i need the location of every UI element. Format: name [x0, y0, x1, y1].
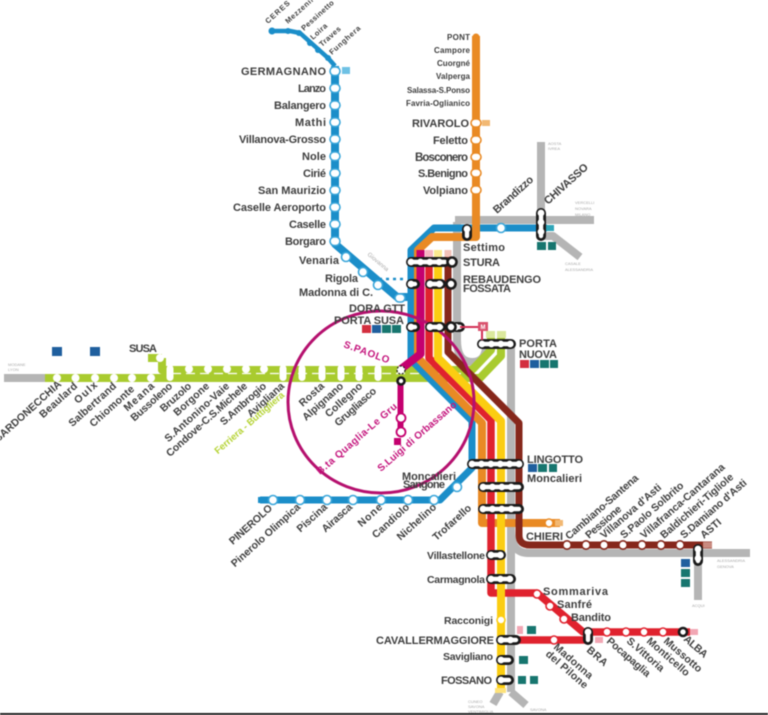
- labels: north blue line: Lanzo: [298, 83, 326, 95]
- labels: city stations: REBAUDENGO: [463, 274, 541, 286]
- destination notes: CUNEO: [468, 699, 482, 704]
- labels: north blue line: Giovanna: [366, 252, 390, 273]
- labels: Asti line: S.Paolo Solbrito: [618, 480, 686, 541]
- destination notes: LYON: [8, 367, 19, 372]
- labels: south stations and Alba line: Bandito: [571, 612, 611, 624]
- labels: green line: Grugliasco: [332, 385, 379, 429]
- labels: orange line: S.Benigno: [418, 168, 468, 180]
- labels: Pinerolo line: Airasca: [319, 501, 355, 535]
- labels: green line: Avigliana: [245, 380, 287, 420]
- destination notes: SAVONA: [468, 704, 485, 709]
- Rigola dotted link: [372, 278, 403, 280]
- destination notes: NOVARA: [575, 206, 592, 211]
- orange stations: [471, 34, 481, 194]
- labels: orange line: Settimo: [463, 242, 505, 254]
- labels: orange line: Valperga: [436, 72, 471, 81]
- labels: south stations and Alba line: del Pilone: [543, 648, 590, 691]
- destination notes: IVREA: [548, 146, 560, 151]
- labels: orange line: Feletto: [433, 135, 468, 147]
- labels: orange line: Brandizzo: [491, 174, 536, 216]
- labels: orange line: Bosconero: [415, 152, 468, 164]
- blue line main and Pinerolo: [260, 228, 547, 500]
- labels: north blue line: Venaria: [299, 255, 340, 267]
- labels: orange line: CHIVASSO: [542, 161, 591, 207]
- labels: south stations and Alba line: BRA: [584, 644, 610, 669]
- metro link at Porta Susa: M: [480, 325, 486, 331]
- labels: south stations and Alba line: Villastellone: [427, 550, 485, 562]
- labels: green line: Borgone: [171, 380, 212, 419]
- labels: Asti line: S.Damiano d'Asti: [678, 477, 749, 541]
- labels: north blue line: Mathi: [295, 117, 326, 129]
- labels: south stations and Alba line: Madonna: [551, 641, 595, 682]
- magenta line San Paolo Orbassano: [394, 250, 420, 445]
- labels: north blue line: Caselle: [289, 219, 326, 231]
- labels: orange line: Favria-Oglianico: [406, 99, 470, 108]
- labels: city stations: Sangone: [403, 479, 445, 491]
- labels: north blue line: Loira: [308, 21, 330, 41]
- destination notes: CASALE: [565, 261, 581, 266]
- labels: city stations: CHIERI: [526, 531, 563, 543]
- labels: north blue line: Villanova-Grosso: [239, 134, 326, 146]
- labels: Asti line: Baldichieri-Tigliole: [658, 471, 736, 541]
- labels: north blue line: Caselle Aeroporto: [233, 202, 326, 214]
- labels: orange line: Cuorgné: [437, 59, 471, 68]
- labels: Asti line: Pessione: [583, 503, 624, 541]
- labels: north blue line: [233, 0, 390, 299]
- green line Bardonecchia Susa: [45, 335, 501, 378]
- destination notes: ACQUI: [692, 603, 705, 608]
- labels: Pinerolo line: Trofarello: [430, 502, 474, 543]
- line tabs at head of bundle: [425, 250, 506, 693]
- labels: city stations: Moncalieri: [527, 473, 582, 485]
- labels: Pinerolo line: PINEROLO: [227, 502, 275, 547]
- labels: north blue line: Balangero: [274, 100, 326, 112]
- labels: south stations and Alba line: Sommariva: [543, 586, 609, 598]
- labels: magenta line stations: S.PAOLO: [342, 339, 391, 366]
- labels: green line: Collegno: [323, 380, 365, 420]
- labels: north blue line: Rigola: [325, 273, 359, 285]
- labels: magenta line stations: S.Luigi di Orbassano: [376, 400, 459, 474]
- labels: magenta line stations: B.ta Quaglia-Le Gru: [315, 401, 400, 477]
- labels: city stations: [334, 257, 583, 543]
- labels: city stations: PORTA: [519, 338, 557, 350]
- labels: Pinerolo line: None: [355, 501, 385, 530]
- labels: south stations and Alba line: Mussotto: [661, 635, 704, 675]
- labels: green line: Oulx: [72, 379, 100, 406]
- destination notes: SAVONA: [530, 707, 547, 712]
- destination notes: MODANE: [8, 362, 26, 367]
- labels: Asti line: ASTI: [698, 516, 724, 541]
- destination notes: ALESSANDRIA: [717, 558, 745, 563]
- labels: green line: Beaulard: [37, 380, 80, 421]
- labels: north blue line: Madonna di C.: [299, 287, 373, 299]
- labels: orange line: Volpiano: [423, 185, 468, 197]
- labels: orange line: Salassa-S.Ponso: [407, 86, 470, 95]
- labels: city stations: Moncalieri: [402, 471, 456, 483]
- labels: south stations and Alba line: Savigliano: [443, 651, 493, 663]
- green stations: [53, 354, 382, 382]
- labels: Asti line: Villafranca-Cantarana: [638, 461, 728, 541]
- labels: north blue line: Funghera: [327, 23, 363, 56]
- labels: green line: Bruzolo: [158, 380, 194, 415]
- labels: Asti line: Cambiano-Santena: [563, 472, 641, 542]
- destination notes: VENTIMIGLIA: [468, 709, 494, 714]
- labels: city stations: STURA: [463, 257, 500, 269]
- labels: city stations: LINGOTTO: [527, 454, 583, 466]
- red line: [429, 252, 690, 640]
- labels: Pinerolo line: Pinerolo Olimpica: [229, 501, 303, 570]
- labels: green line: Alpignano: [300, 380, 346, 423]
- labels: Pinerolo line: [227, 501, 474, 570]
- labels: orange line: Campore: [434, 46, 471, 55]
- destination notes: ALESSANDRIA: [565, 267, 593, 272]
- destination notes: VERCELLI: [575, 200, 594, 205]
- labels: orange line: RIVAROLO: [412, 118, 469, 130]
- metro link at Porta Susa: [460, 322, 488, 340]
- labels: north blue line: GERMAGNANO: [241, 66, 326, 78]
- labels: north blue line: Traves: [317, 24, 343, 48]
- labels: north blue line: San Maurizio: [258, 185, 326, 197]
- labels: north blue line: Cirié: [303, 168, 326, 180]
- labels: orange line: PONT: [447, 33, 470, 42]
- service badges: [45, 67, 712, 684]
- labels: green line: Salbertrand: [66, 380, 119, 429]
- labels: south stations and Alba line: ALBA: [681, 633, 710, 661]
- labels: Pinerolo line: Piscina: [294, 501, 330, 535]
- labels: north blue line: Nole: [302, 151, 326, 163]
- labels: green line: Chiomonte: [87, 383, 137, 430]
- labels: south stations and Alba line: Racconigi: [444, 615, 493, 627]
- labels: city stations: FOSSATA: [463, 283, 511, 295]
- interchange station capsules: [396, 213, 698, 680]
- labels: green line: SUSA: [129, 343, 157, 355]
- labels: city stations: PORTA SUSA: [334, 315, 404, 327]
- labels: Asti line: [563, 461, 749, 542]
- labels: north blue line: Borgaro: [285, 236, 326, 248]
- labels: green line: Bussoleno: [128, 380, 175, 424]
- labels: green line: Condove-C.S.Michele: [164, 380, 250, 459]
- Pinerolo blue stations: [268, 482, 462, 504]
- labels: green line: Ferriera - Buttigliera: [213, 390, 287, 457]
- labels: south stations and Alba line: FOSSANO: [441, 675, 492, 687]
- circle highlighting the San Paolo area: [288, 311, 474, 493]
- brown and red stations: [497, 519, 684, 644]
- labels: green line: S.Antonino-Vaie: [162, 380, 232, 445]
- labels: south stations and Alba line: Pocapaglia: [604, 635, 653, 680]
- labels: green line: Rosta: [297, 380, 327, 409]
- labels: city stations: NUOVA: [519, 349, 557, 361]
- destination notes: [8, 141, 745, 714]
- destination notes: AOSTA: [548, 141, 562, 146]
- destination notes: GENOVA: [717, 564, 734, 569]
- north blue stations: [330, 67, 506, 302]
- labels: green line: Meana: [121, 380, 157, 414]
- yellow line: [438, 252, 501, 692]
- labels: city stations: DORA GTT: [349, 303, 405, 315]
- labels: south stations and Alba line: Carmagnola: [427, 574, 485, 586]
- blue line Ceres Germagnano: [268, 28, 411, 297]
- labels: south stations and Alba line: CAVALLERMAGGIORE: [376, 635, 494, 647]
- labels: magenta line stations: [315, 339, 459, 477]
- destination notes: MILANO: [575, 212, 590, 217]
- labels: south stations and Alba line: S.Vittoria: [624, 635, 667, 675]
- labels: Pinerolo line: Nichelino: [395, 501, 439, 543]
- labels: orange line: [406, 33, 591, 254]
- labels: south stations and Alba line: Monticello: [644, 635, 692, 679]
- orange line Pont Chieri: [418, 36, 560, 523]
- labels: green line: [0, 343, 379, 459]
- bottom edge strip: [0, 713, 768, 715]
- labels: Asti line: Villanova d'Asti: [598, 482, 664, 541]
- labels: south stations and Alba line: Sanfré: [557, 599, 592, 611]
- labels: south stations and Alba line: [376, 550, 710, 691]
- grey national rail lines: [4, 142, 750, 705]
- brown line Asti: [448, 252, 712, 545]
- labels: green line: S.Ambrogio: [218, 380, 269, 428]
- labels: Pinerolo line: Candiolo: [370, 501, 412, 541]
